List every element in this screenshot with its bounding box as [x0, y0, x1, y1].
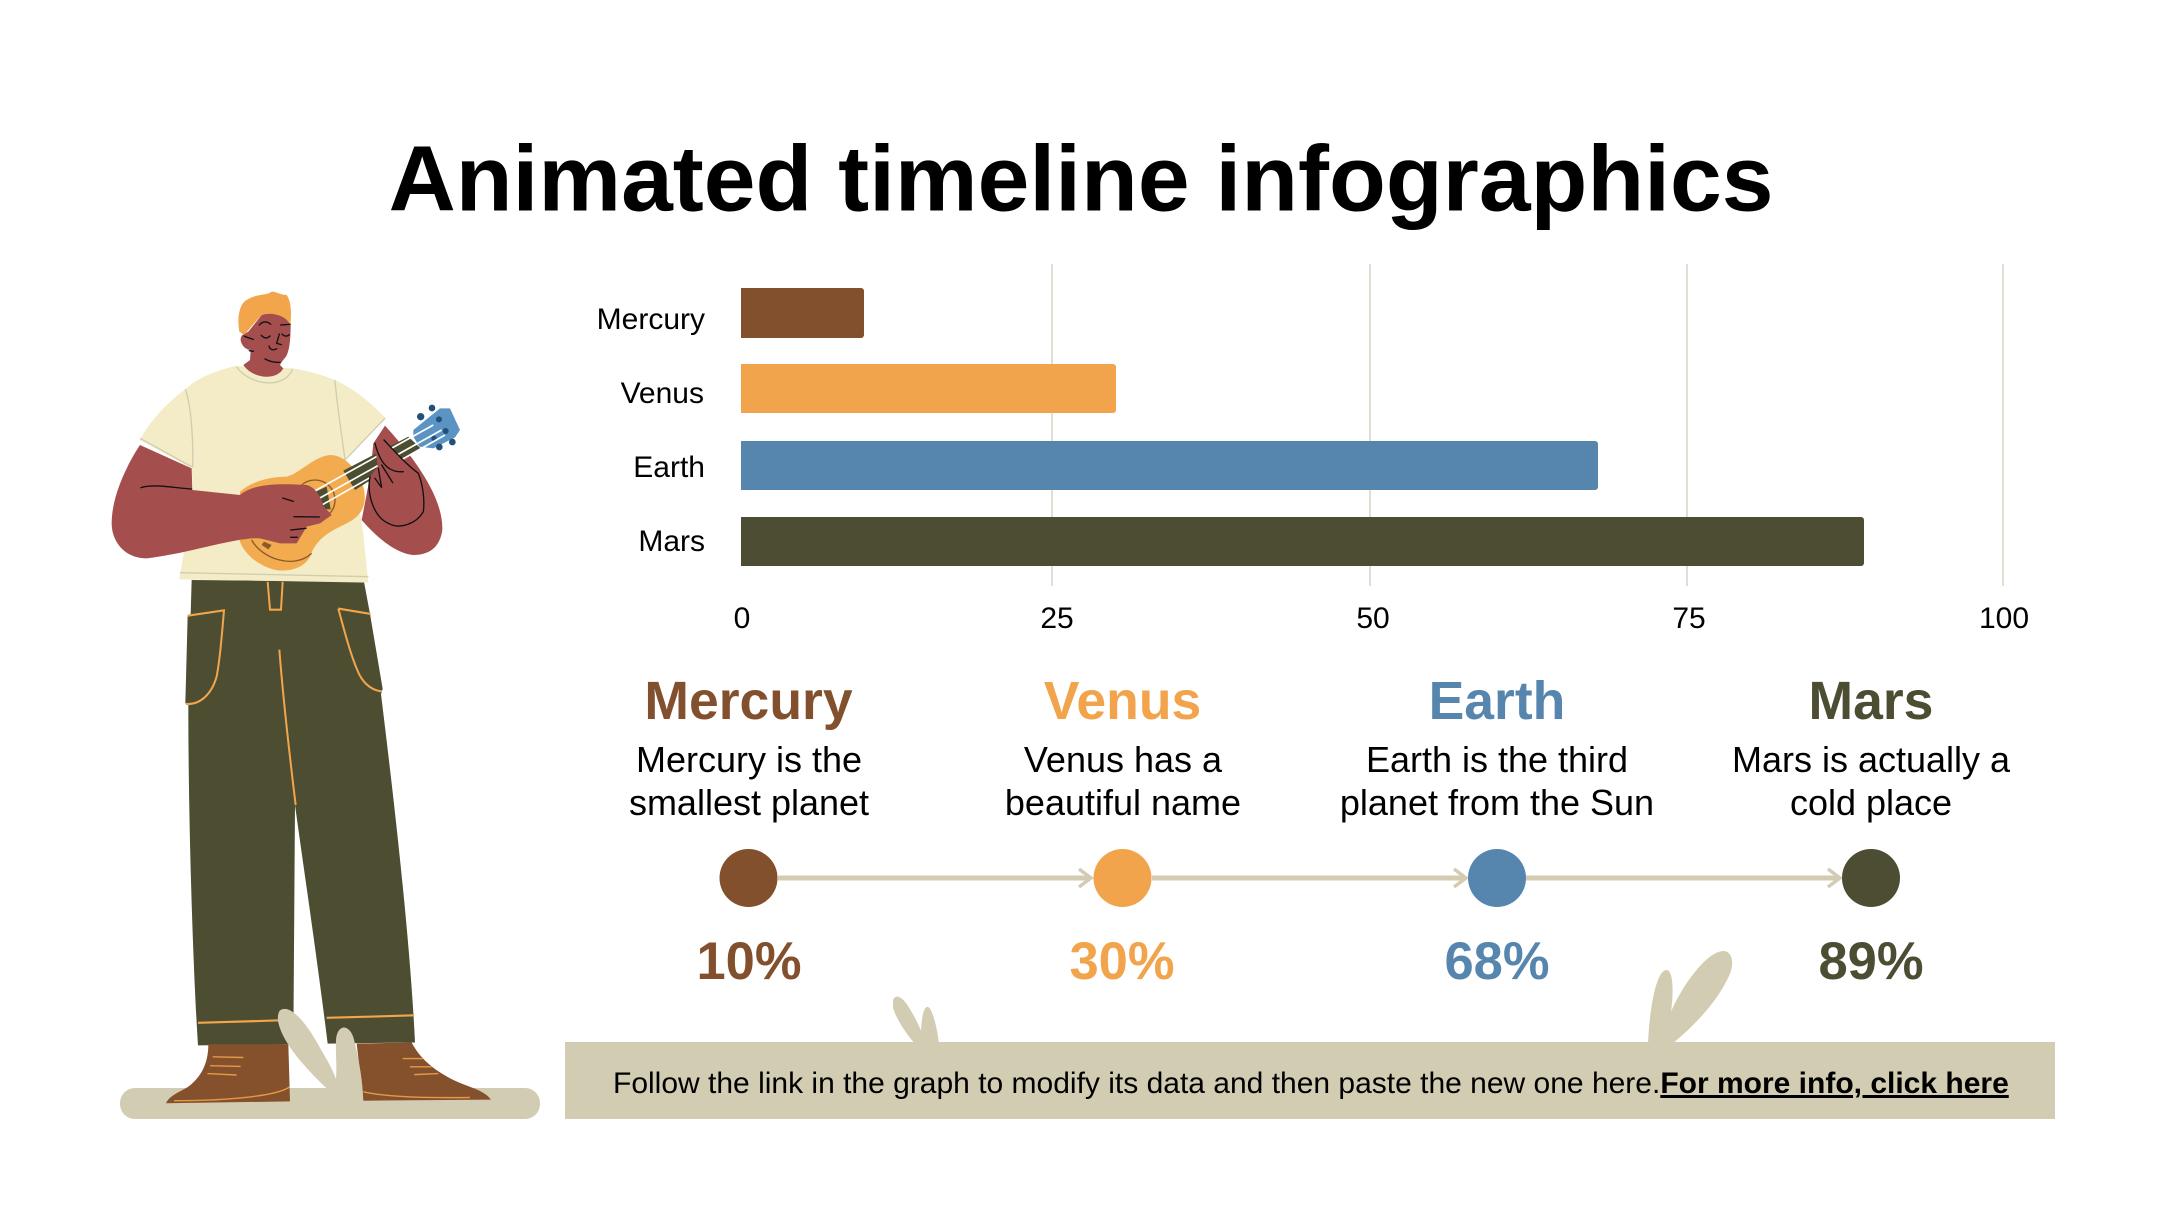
description: Mercury: smallest planet — [629, 782, 869, 823]
bar: Mercury 10 — [741, 288, 864, 338]
description: Earth: Earth is the third — [1366, 739, 1628, 780]
bar: Earth 68 — [741, 441, 1598, 490]
node: Venus — [1094, 849, 1152, 907]
ground — [120, 1088, 540, 1119]
ukulele details — [252, 480, 335, 561]
category labels — [597, 303, 705, 558]
face lines — [244, 322, 290, 362]
description: Venus: Venus has a — [1024, 739, 1223, 780]
description: Earth: planet from the Sun — [1340, 782, 1654, 823]
bar: Venus 30 — [741, 364, 1116, 413]
fretting hand lines — [369, 440, 424, 526]
boot details — [174, 1057, 470, 1101]
shirt seams — [140, 367, 385, 577]
ukulele headstock — [413, 408, 460, 448]
node: Mars — [1842, 849, 1900, 907]
value axis labels: 75 — [1672, 602, 1706, 635]
bar chart — [597, 264, 2029, 635]
lower body: trousers and boots — [166, 580, 491, 1103]
arrow: Mercury to Venus — [778, 869, 1091, 887]
value axis labels: 100 — [1979, 602, 2029, 635]
value axis labels: 50 — [1356, 602, 1390, 635]
category labels: Mars — [638, 525, 705, 558]
node: Mercury — [720, 849, 778, 907]
plant: right of footer — [1648, 951, 1732, 1044]
percent: Earth: 68% — [1444, 932, 1550, 991]
arrow: Venus to Earth — [1152, 869, 1466, 887]
fretting hand — [369, 440, 424, 526]
strings — [297, 425, 445, 508]
timeline — [720, 849, 1900, 907]
illustration: man playing ukulele — [112, 292, 540, 1119]
percent: Venus: 30% — [1069, 932, 1175, 991]
t-shirt — [140, 366, 386, 583]
planet heading: Mercury: Mercury — [644, 672, 853, 731]
value axis labels — [734, 602, 2029, 635]
boots — [166, 1044, 290, 1103]
description: Venus: beautiful name — [1005, 782, 1241, 823]
percent: Mars: 89% — [1818, 932, 1924, 991]
upper body — [112, 292, 460, 583]
description: Mars: Mars is actually a — [1732, 739, 2011, 780]
trouser seams — [186, 582, 414, 1023]
ukulele neck — [343, 437, 421, 490]
footer banner — [565, 1042, 2055, 1119]
ukulele body — [239, 455, 365, 571]
category labels: Venus — [621, 377, 704, 410]
planet heading: Mars: Mars — [1809, 672, 1933, 731]
plant: left of footer — [893, 997, 939, 1044]
left arm lines — [141, 486, 319, 537]
plant in front of legs — [278, 1009, 339, 1094]
footer text: Follow the link in the graph to modify its data and then paste the new one here.For more info, click here — [613, 1067, 2009, 1100]
node: Earth — [1468, 849, 1526, 907]
value axis labels: 0 — [734, 602, 750, 635]
category labels: Mercury — [597, 303, 705, 336]
title: Animated timeline infographics — [389, 126, 1773, 230]
category labels: Earth — [633, 451, 705, 484]
left arm and strumming hand — [112, 445, 332, 558]
tuners — [417, 405, 456, 450]
percent: Mercury: 10% — [696, 932, 802, 991]
arrow: Earth to Mars — [1526, 869, 1840, 887]
value axis labels: 25 — [1040, 602, 1074, 635]
head and neck — [241, 313, 291, 377]
planet heading: Earth: Earth — [1429, 672, 1565, 731]
bridge — [262, 542, 272, 549]
hair — [238, 292, 291, 335]
sound hole fill — [297, 487, 331, 509]
planet heading: Venus: Venus — [1044, 672, 1201, 731]
description: Mars: cold place — [1790, 782, 1952, 823]
right arm — [362, 426, 442, 555]
trousers — [185, 580, 415, 1045]
description: Mercury: Mercury is the — [636, 739, 862, 780]
bar: Mars 89 — [741, 517, 1864, 566]
